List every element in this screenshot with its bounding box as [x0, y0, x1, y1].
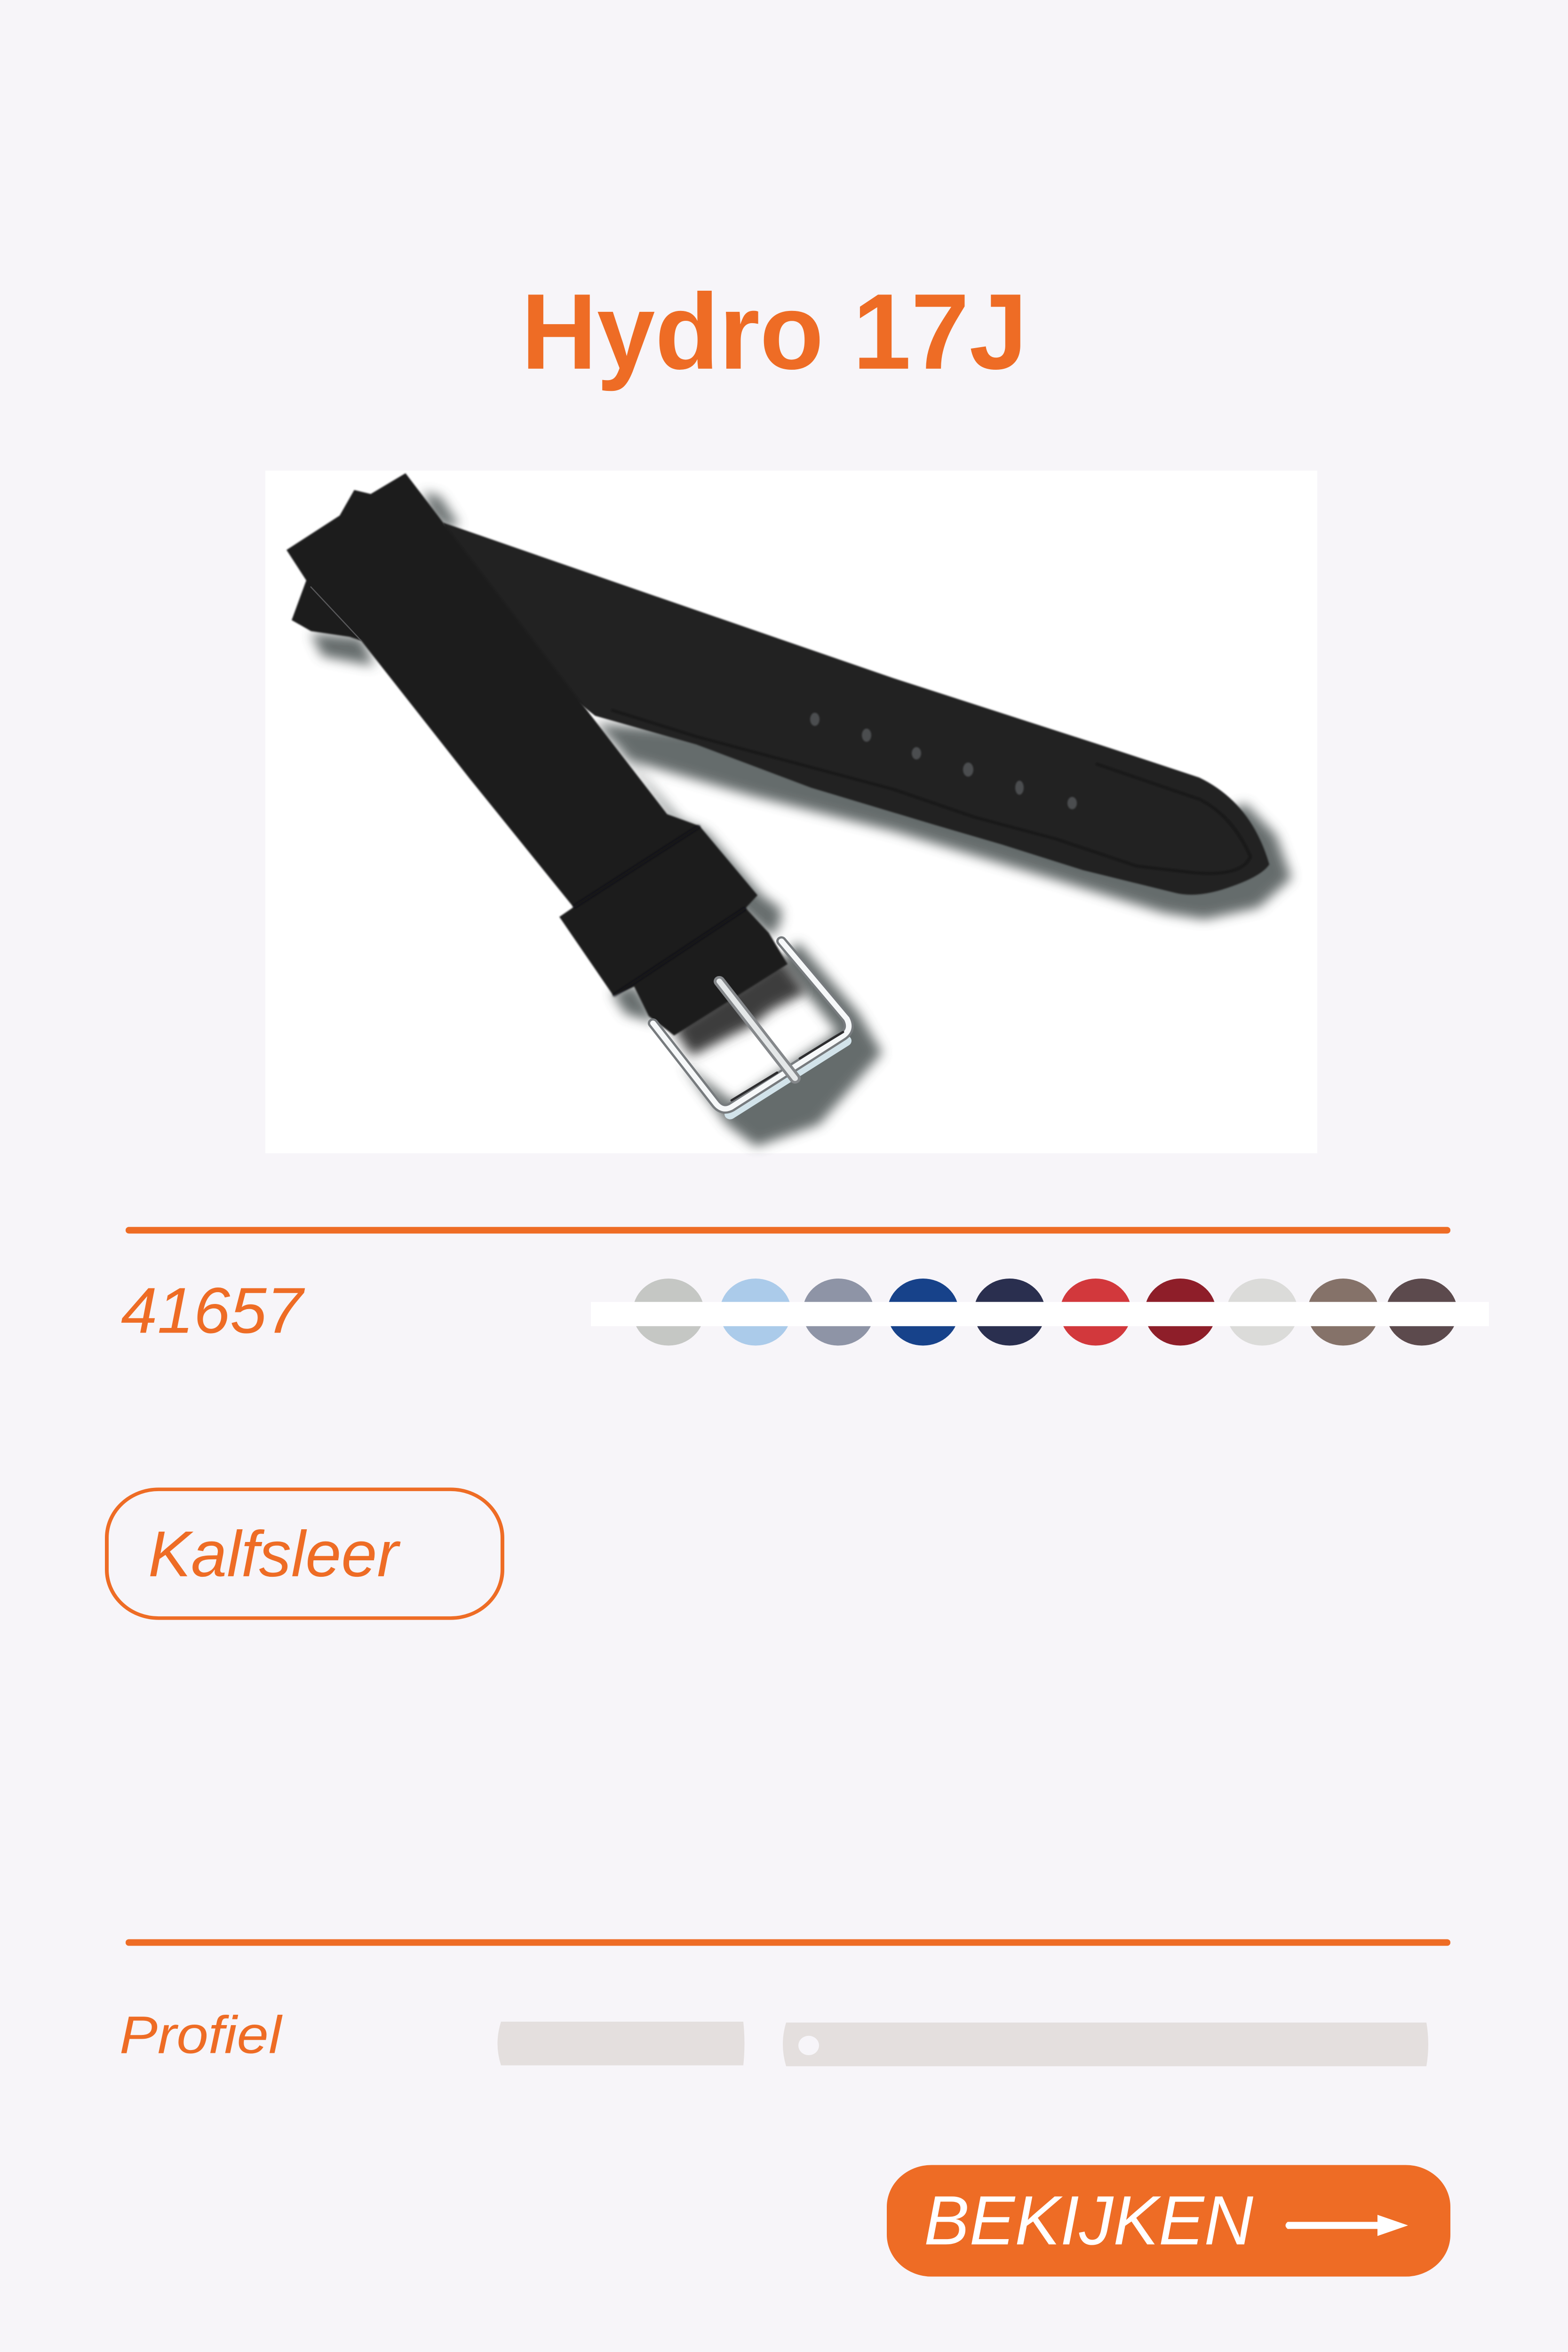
- view button: BEKIJKEN: [924, 2182, 1253, 2259]
- strap holes: [810, 713, 1077, 809]
- strap profile diagram: [498, 2022, 1428, 2066]
- strap shadows: [311, 492, 1291, 1147]
- colour swatches: [591, 1279, 1489, 1345]
- buckle front plate: [730, 1041, 846, 1114]
- buckle: [653, 941, 849, 1114]
- view button: [887, 2165, 1450, 2277]
- flap crease: [310, 587, 361, 641]
- arrow icon: [1285, 2215, 1408, 2236]
- short strap with keeper: [287, 473, 788, 1035]
- long strap stitching: [612, 710, 1250, 874]
- profile label: Profiel: [119, 2005, 283, 2065]
- product photo: black watch strap: [265, 470, 1317, 1153]
- material tag: Kalfsleer: [148, 1518, 401, 1590]
- long strap: [443, 523, 1269, 895]
- article number: 41657: [121, 1274, 305, 1347]
- keeper edge shading: [573, 826, 746, 996]
- divider bottom: [126, 1939, 1450, 1946]
- material tag: [107, 1489, 502, 1618]
- divider top: [126, 1227, 1450, 1233]
- shadow under buckle end of strap: [673, 957, 807, 1056]
- title: Hydro 17J: [521, 272, 1027, 392]
